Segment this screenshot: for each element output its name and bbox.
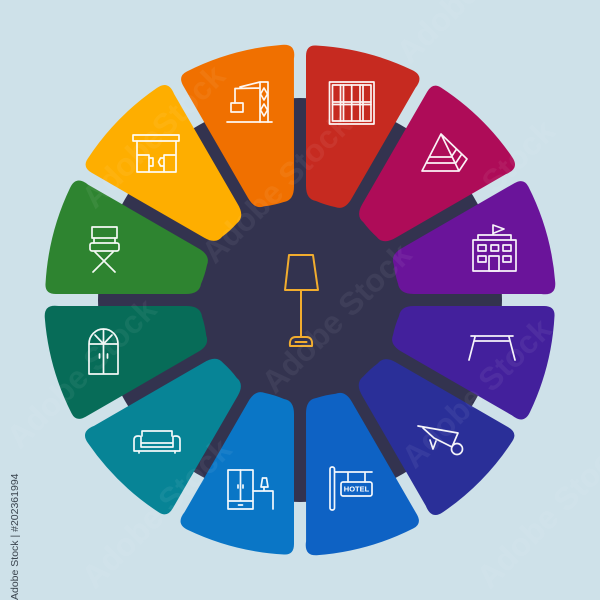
icon: director chair <box>90 227 119 272</box>
sign text: HOTEL <box>344 484 370 494</box>
icon: school building <box>473 225 516 271</box>
icon: fuel pumps <box>133 135 179 172</box>
petal: purple <box>383 178 580 357</box>
dark centre disc <box>98 98 502 502</box>
petal: orange <box>178 20 357 217</box>
petal: magenta <box>351 83 531 280</box>
icon: hotel sign <box>330 467 372 510</box>
watermark: Adobe Stock <box>0 291 163 455</box>
petal: green <box>45 181 208 294</box>
icon: sofa <box>134 431 180 453</box>
icon: floor lamp <box>285 255 318 346</box>
petal: teal <box>69 320 249 517</box>
icon: arched door <box>89 329 118 374</box>
petal: indigo <box>320 351 517 531</box>
watermark: Adobe Stock <box>194 106 358 270</box>
petal: dark green <box>20 243 217 422</box>
icon: table <box>469 336 515 360</box>
vertical credit text: Adobe Stock | #202361994 <box>9 473 21 600</box>
watermark: Stock <box>474 113 562 200</box>
icon: prism <box>422 134 467 171</box>
icon: wardrobe and desk <box>228 470 273 509</box>
petal: blue <box>181 392 294 555</box>
watermark: Adobe Stock <box>394 311 558 475</box>
watermark: AdobeStock <box>74 57 232 215</box>
icon: crane <box>227 82 272 122</box>
icon: window <box>330 82 374 124</box>
watermark: Adobe Stock <box>254 236 418 400</box>
petal: violet <box>392 306 555 419</box>
petal: amber <box>83 69 280 249</box>
petal: royal blue <box>243 383 422 580</box>
petal: red <box>306 45 419 208</box>
icon: wheelbarrow <box>418 426 462 454</box>
watermark: Adobe Stock <box>74 431 238 595</box>
